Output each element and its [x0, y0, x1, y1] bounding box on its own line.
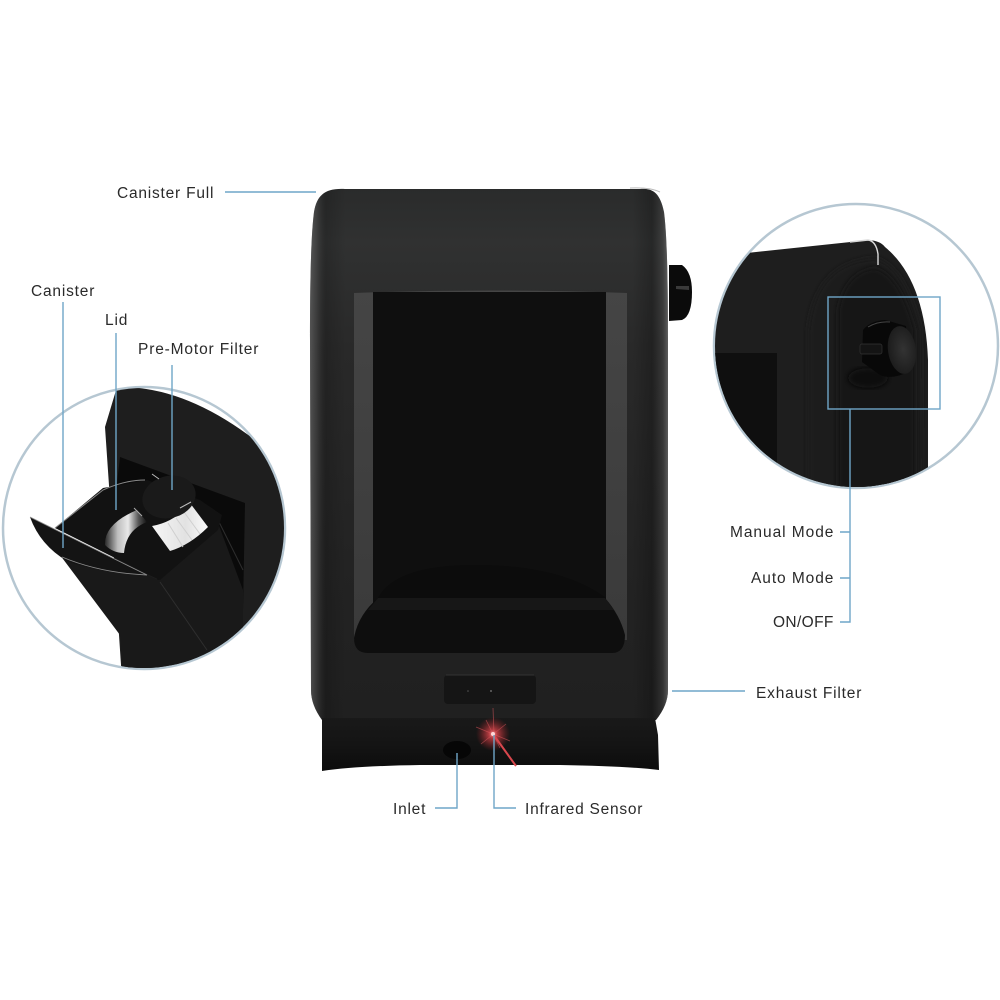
- control panel: [444, 675, 536, 704]
- inner hump: [378, 565, 606, 598]
- back housing: [105, 387, 290, 680]
- label: canister full: Canister Full: [117, 185, 214, 202]
- label: exhaust filter: Exhaust Filter: [756, 685, 862, 702]
- cap highlight marks: [152, 474, 191, 508]
- label: auto mode: Auto Mode: [751, 570, 834, 587]
- label: infrared sensor: Infrared Sensor: [525, 801, 643, 818]
- body close-up: [715, 240, 928, 487]
- lid detail marks: [134, 508, 142, 516]
- base: [322, 718, 659, 771]
- callout lines: [63, 192, 940, 808]
- infrared sensor laser: [476, 708, 516, 766]
- recess: [117, 457, 245, 600]
- lid ring: [105, 510, 147, 553]
- pre-motor filter: [152, 503, 208, 551]
- canister body: [62, 526, 243, 668]
- canister flap: [30, 517, 147, 575]
- side edge shading: [310, 189, 668, 720]
- window inner recess: [373, 292, 606, 612]
- knob: [860, 320, 919, 377]
- label: on/off: ON/OFF: [773, 614, 834, 631]
- canister interior: [55, 480, 222, 580]
- window tray: [354, 598, 625, 653]
- inner arch: [838, 268, 915, 490]
- window corner: [715, 353, 777, 463]
- canister body edges: [160, 520, 243, 650]
- label: inlet: Inlet: [393, 801, 426, 818]
- window strips: [354, 290, 627, 640]
- label: lid: Lid: [105, 312, 128, 329]
- zoom circle: knob: [700, 204, 998, 500]
- knob shadow: [848, 368, 888, 388]
- filter cap: [152, 476, 196, 518]
- zoom circle: canister: [3, 387, 290, 680]
- label: pre-motor filter: Pre-Motor Filter: [138, 341, 259, 358]
- canister full indicator highlight: [850, 240, 878, 265]
- main device body: [310, 188, 692, 771]
- arch shading: [806, 324, 926, 487]
- label: manual mode: Manual Mode: [730, 524, 834, 541]
- top edge highlight: [630, 188, 660, 192]
- side button: [669, 265, 692, 321]
- label: canister: Canister: [31, 283, 95, 300]
- inlet opening: [443, 741, 471, 759]
- device shell: [310, 189, 668, 720]
